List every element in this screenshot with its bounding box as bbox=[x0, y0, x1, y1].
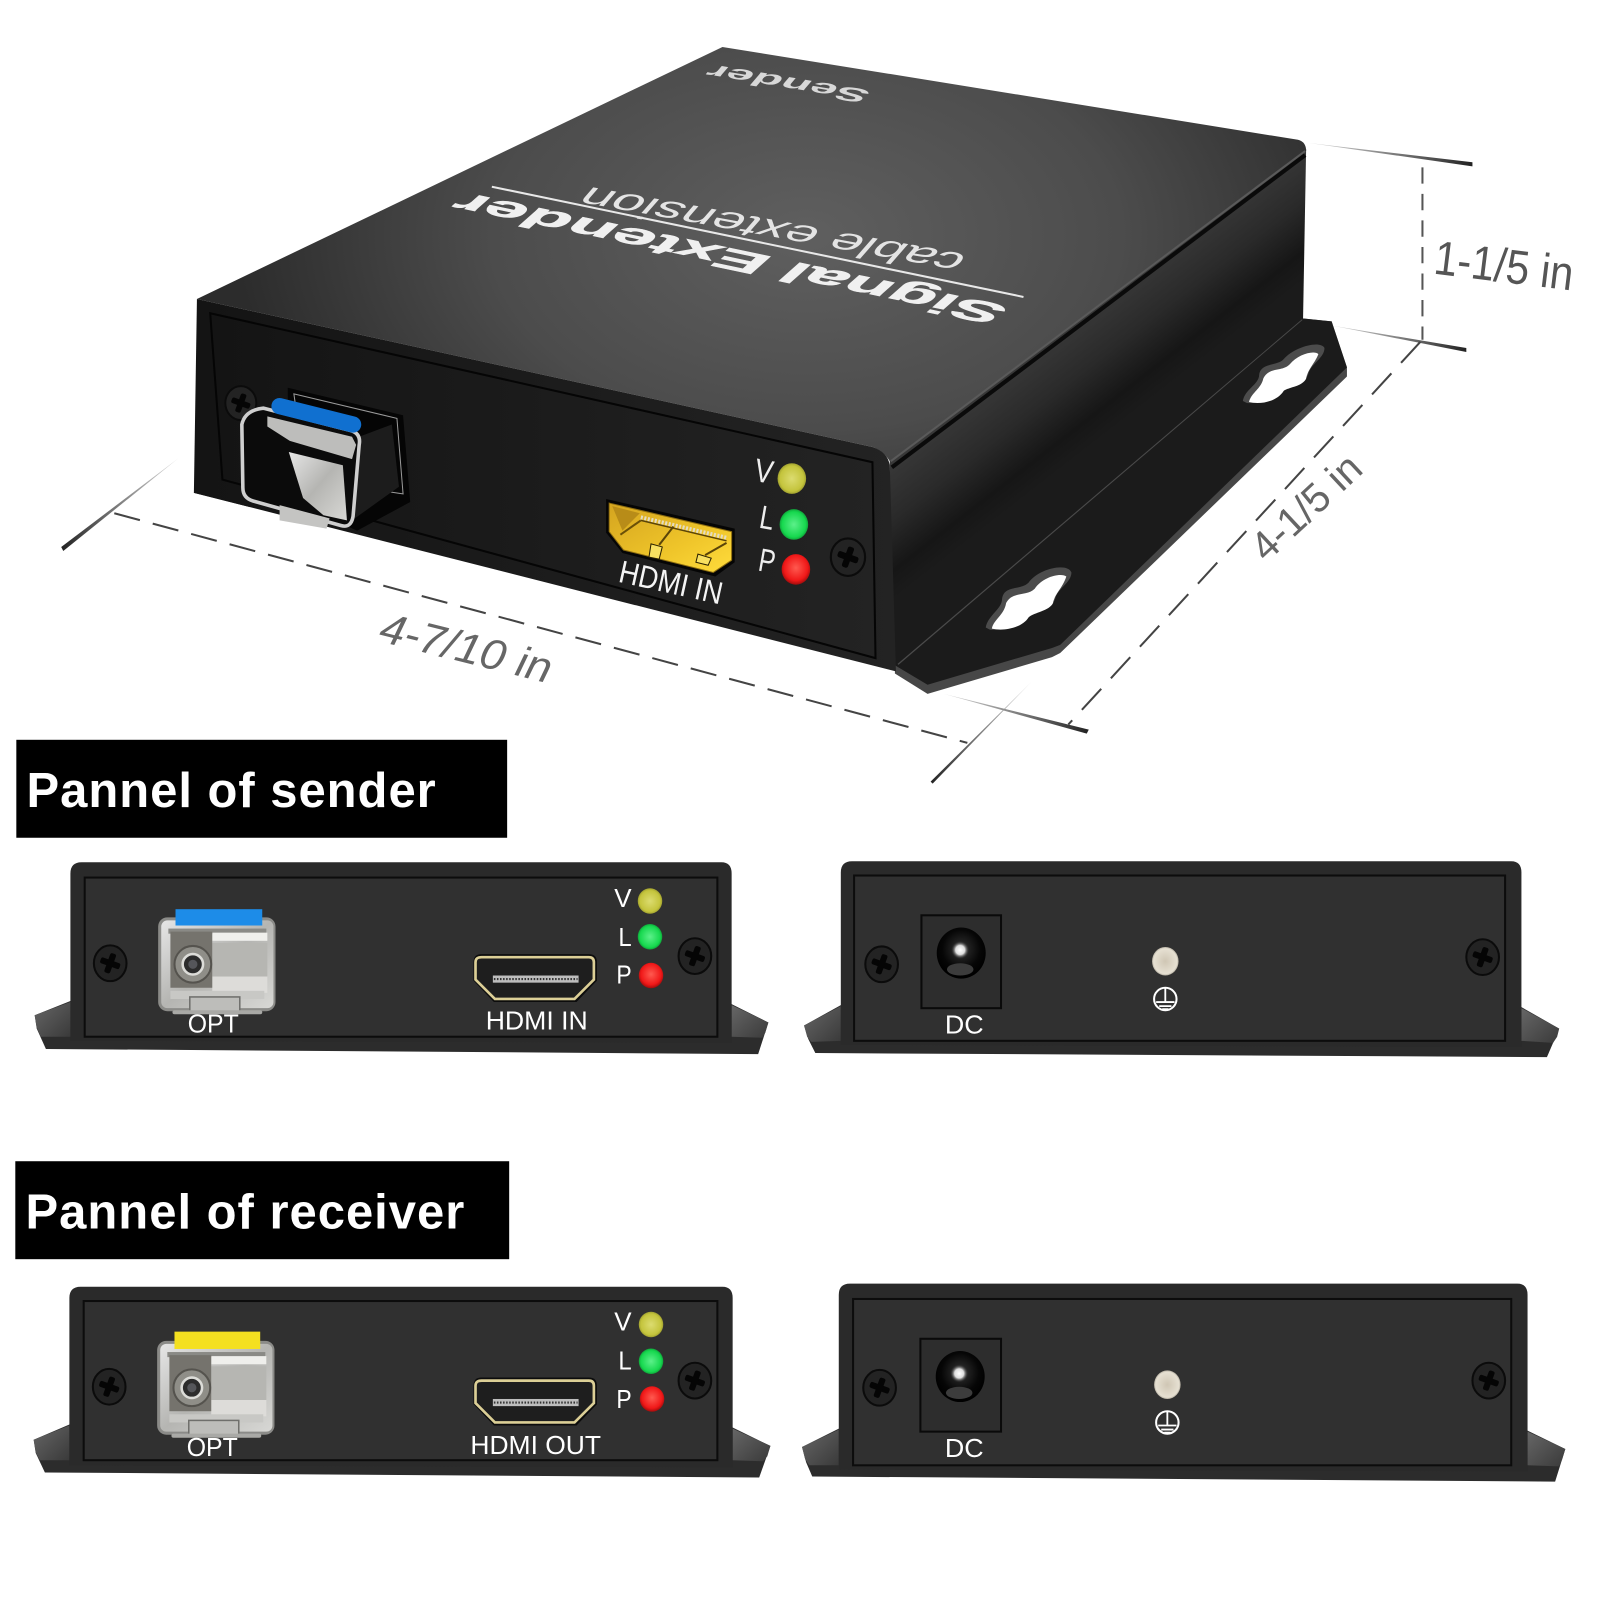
ground symbol bbox=[1154, 988, 1177, 1010]
heading: pannel of receiver: Pannel of receiver bbox=[26, 1186, 464, 1240]
top face bbox=[197, 47, 1306, 461]
panel: sender front bbox=[35, 862, 768, 1054]
heading: pannel of sender: Pannel of sender bbox=[27, 764, 436, 818]
depth value: 4-1/5 in bbox=[1241, 444, 1371, 570]
DC label: DC bbox=[945, 1012, 984, 1040]
status LEDs and letters: P bbox=[756, 541, 778, 580]
ground symbol bbox=[1156, 1411, 1179, 1434]
panel: sender rear bbox=[804, 861, 1559, 1057]
side face bbox=[890, 149, 1306, 668]
height dimension bbox=[1308, 143, 1577, 352]
optical module bbox=[242, 388, 410, 531]
DC label: DC bbox=[945, 1435, 984, 1463]
HDMI IN label: HDMI IN bbox=[486, 1008, 588, 1036]
screws bbox=[863, 1363, 1505, 1406]
top face divider bbox=[492, 187, 1023, 297]
keyhole slot rear bbox=[1243, 344, 1324, 403]
grounding post bbox=[1152, 947, 1179, 976]
OPT label: OPT bbox=[188, 1011, 239, 1039]
screws bbox=[93, 1363, 711, 1405]
front screw left bbox=[225, 386, 256, 420]
status LEDs: V bbox=[614, 885, 632, 913]
width dimension bbox=[61, 458, 1089, 784]
DC jack bbox=[921, 915, 1001, 1008]
status LEDs: L bbox=[618, 1347, 632, 1375]
heading: pannel of receiver bbox=[15, 1161, 509, 1259]
main device: sender extender in 3D bbox=[194, 47, 1347, 694]
HDMI OUT label: HDMI OUT bbox=[470, 1432, 601, 1460]
status LEDs: L bbox=[618, 924, 632, 952]
width value: 4-7/10 in bbox=[375, 604, 557, 693]
screws bbox=[865, 939, 1499, 982]
top face text: signal extender: Signal Extender bbox=[441, 187, 1018, 329]
panel: receiver front bbox=[34, 1287, 770, 1478]
DC jack bbox=[920, 1339, 1001, 1432]
status LEDs bbox=[614, 1309, 664, 1414]
depth dimension bbox=[1068, 342, 1420, 724]
grounding post bbox=[1154, 1370, 1181, 1399]
top face text: cable extension: cable extension bbox=[568, 181, 975, 280]
front inner panel bbox=[210, 313, 876, 658]
heading: pannel of sender bbox=[16, 740, 507, 838]
HDMI port bbox=[473, 954, 597, 1002]
OPT label: OPT bbox=[187, 1434, 238, 1462]
optical module bbox=[158, 909, 276, 1014]
HDMI IN label: HDMI IN bbox=[616, 553, 726, 611]
keyhole slot front bbox=[986, 567, 1071, 630]
front face bbox=[194, 299, 896, 671]
panel: receiver rear bbox=[802, 1284, 1565, 1482]
HDMI port bbox=[473, 1378, 597, 1426]
height value: 1-1/5 in bbox=[1431, 232, 1577, 301]
status LEDs bbox=[614, 885, 663, 990]
screws bbox=[94, 938, 711, 981]
status LEDs: P bbox=[616, 1386, 632, 1414]
front screw right bbox=[831, 538, 865, 576]
optical module bbox=[157, 1332, 274, 1438]
status LEDs: P bbox=[616, 962, 632, 990]
status LEDs: V bbox=[614, 1309, 632, 1337]
right mounting flange bbox=[895, 318, 1347, 694]
top face text: sender: Sender bbox=[700, 60, 876, 106]
status LEDs and letters bbox=[752, 451, 810, 585]
left mounting flange wedge bbox=[194, 442, 250, 507]
status LEDs and letters: V bbox=[752, 451, 777, 491]
status LEDs and letters: L bbox=[757, 498, 777, 537]
gold HDMI port bbox=[606, 499, 735, 577]
